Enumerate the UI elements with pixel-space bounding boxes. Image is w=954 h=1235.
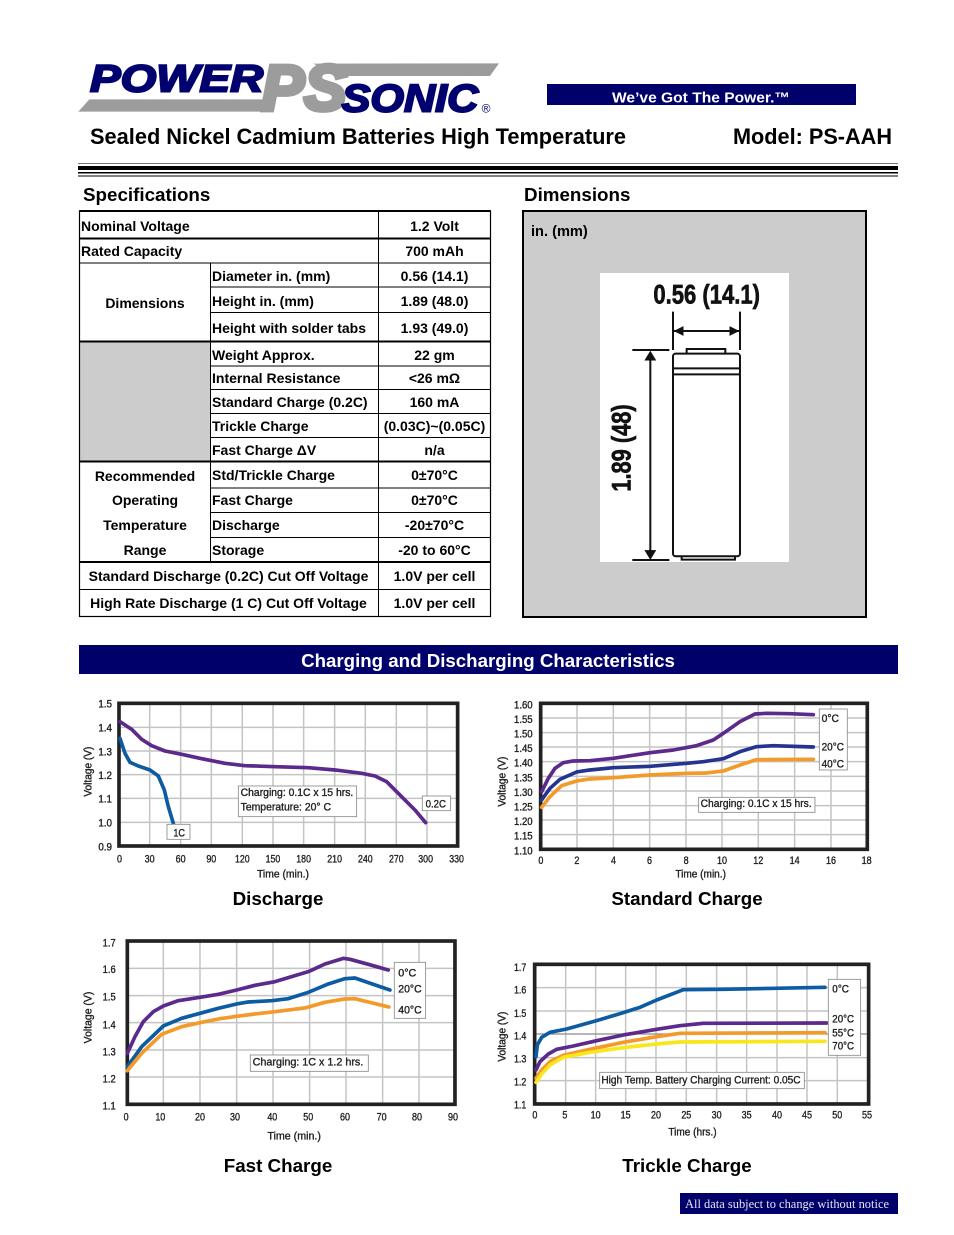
- specifications table: High Rate Discharge (1 C) Cut Off Voltage: [90, 595, 367, 611]
- chart: trickle charge: 35: [742, 1109, 752, 1121]
- chart: fast charge: 60: [340, 1112, 350, 1124]
- chart: discharge: 60: [176, 853, 186, 865]
- specifications table: Nominal Voltage: [81, 218, 190, 234]
- chart: trickle charge: 15: [621, 1109, 631, 1121]
- specifications table: Standard Discharge (0.2C) Cut Off Voltage: [89, 568, 369, 584]
- chart: trickle charge: 25: [681, 1109, 691, 1121]
- specifications table: n/a: [424, 442, 445, 458]
- title: Sealed Nickel Cadmium Batteries High Temperature: [90, 124, 626, 149]
- logo: Power-Sonic: POWER: [90, 58, 264, 101]
- chart: fast charge: 70: [377, 1112, 387, 1124]
- specifications table: Diameter in. (mm): [212, 268, 330, 284]
- chart: discharge: 1.1: [98, 794, 112, 806]
- chart: discharge: 240: [358, 853, 373, 865]
- chart: fast charge: 1.5: [103, 991, 116, 1003]
- chart: standard charge: [496, 699, 872, 881]
- chart: discharge: 0.9: [98, 841, 112, 853]
- specifications table: Discharge: [212, 517, 280, 533]
- chart: discharge: 0: [117, 853, 122, 865]
- chart: discharge: Temperature: 20° C: [241, 802, 331, 814]
- chart: discharge: Time (min.): [257, 869, 309, 881]
- chart: discharge: Charging: 0.1C x 15 hrs.: [241, 787, 353, 799]
- chart: fast charge: 1.3: [103, 1046, 116, 1058]
- specifications table: 1.89 (48.0): [401, 293, 468, 309]
- chart: standard charge: 18: [862, 855, 872, 867]
- logo: Power-Sonic: SONIC: [342, 77, 479, 121]
- panel: dimensions drawing: [523, 211, 866, 617]
- battery diagram: 1.89 (48): [607, 404, 637, 492]
- footer notice: [680, 1193, 898, 1214]
- specifications table: Recommended: [95, 468, 195, 484]
- chart: standard charge: 1.25: [514, 802, 533, 814]
- specifications table: Temperature: [103, 517, 187, 533]
- chart: standard charge: 1.15: [514, 831, 533, 843]
- chart: fast charge: 1.7: [103, 938, 116, 950]
- chart title: discharge: Discharge: [233, 888, 323, 909]
- heading: specifications: Specifications: [83, 184, 210, 205]
- specifications table: 0.56 (14.1): [401, 268, 468, 284]
- specifications table: 0±70°C: [411, 492, 458, 508]
- specifications table: Weight Approx.: [212, 347, 315, 363]
- model number: Model: PS-AAH: [733, 124, 892, 149]
- chart: standard charge: 1.35: [514, 772, 533, 784]
- specifications table: 160 mA: [410, 394, 459, 410]
- chart: trickle charge: 20: [651, 1109, 661, 1121]
- chart: standard charge: 0: [538, 855, 543, 867]
- chart: standard charge: 1.40: [514, 758, 533, 770]
- chart: trickle charge: 45: [802, 1109, 812, 1121]
- specifications table: 1.93 (49.0): [401, 320, 468, 336]
- chart: fast charge: 80: [412, 1112, 422, 1124]
- logo: Power-Sonic: [78, 52, 499, 124]
- chart: standard charge: Charging: 0.1C x 15 hrs.: [701, 798, 812, 810]
- chart: trickle charge: 40: [772, 1109, 782, 1121]
- chart: fast charge: 1.1: [103, 1100, 116, 1112]
- chart: standard charge: 2: [574, 855, 579, 867]
- chart: fast charge: 1.6: [103, 964, 116, 976]
- footer notice: All data subject to change without notice: [685, 1196, 889, 1211]
- chart: standard charge: 1.50: [514, 728, 533, 740]
- section banner: [79, 645, 898, 674]
- specifications table: 700 mAh: [405, 243, 464, 259]
- section banner: Charging and Discharging Characteristics: [301, 650, 675, 671]
- chart: trickle charge: 1.6: [514, 985, 526, 997]
- chart: discharge: 1.4: [98, 723, 112, 735]
- chart: standard charge: 4: [611, 855, 616, 867]
- logo: Power-Sonic: PS: [262, 52, 347, 124]
- chart: fast charge: Charging: 1C x 1.2 hrs.: [253, 1057, 363, 1069]
- chart: trickle charge: High Temp. Battery Charging Current: 0.05C: [601, 1074, 801, 1086]
- specifications table: Range: [124, 542, 167, 558]
- chart title: fast charge: Fast Charge: [224, 1155, 332, 1176]
- specifications table: (0.03C)~(0.05C): [384, 418, 485, 434]
- specifications table: -20 to 60°C: [398, 542, 471, 558]
- chart: trickle charge: 50: [832, 1109, 842, 1121]
- chart: fast charge: Voltage (V): [83, 991, 95, 1043]
- chart: trickle charge: 1.3: [514, 1054, 526, 1066]
- specifications table: -20±70°C: [405, 517, 464, 533]
- specifications table: Standard Charge (0.2C): [212, 394, 368, 410]
- chart: fast charge: 0: [124, 1112, 129, 1124]
- chart: fast charge: 0°C: [398, 968, 416, 980]
- specifications table: Storage: [212, 542, 264, 558]
- specifications table: Height in. (mm): [212, 293, 314, 309]
- specifications table: Height with solder tabs: [212, 320, 366, 336]
- logo: Power-Sonic: ®: [482, 101, 491, 115]
- chart: trickle charge: 70°C: [832, 1040, 854, 1052]
- chart: discharge: 1.2: [98, 770, 112, 782]
- heading: dimensions: Dimensions: [524, 184, 630, 205]
- chart: discharge: 180: [296, 853, 311, 865]
- chart: fast charge: [83, 938, 458, 1142]
- chart: trickle charge: Voltage (V): [496, 1011, 508, 1062]
- specifications table: 1.2 Volt: [410, 218, 459, 234]
- battery diagram: [607, 280, 760, 560]
- chart: trickle charge: 10: [591, 1109, 601, 1121]
- chart: trickle charge: 1.2: [514, 1076, 526, 1088]
- chart: fast charge: 1.2: [103, 1074, 116, 1086]
- specifications table: 22 gm: [414, 347, 455, 363]
- chart: discharge: 270: [389, 853, 404, 865]
- specifications table: [80, 211, 490, 616]
- chart: trickle charge: 30: [712, 1109, 722, 1121]
- chart: trickle charge: 1.4: [514, 1030, 526, 1042]
- chart: trickle charge: 55°C: [832, 1028, 854, 1040]
- chart: trickle charge: 20°C: [832, 1014, 854, 1026]
- chart: standard charge: Time (min.): [675, 869, 726, 881]
- specifications table: Fast Charge ΔV: [212, 442, 317, 458]
- specifications table: Dimensions: [105, 295, 185, 311]
- specifications table: Operating: [112, 492, 178, 508]
- chart: fast charge: 40: [267, 1112, 277, 1124]
- chart: discharge: 120: [235, 853, 250, 865]
- chart: fast charge: 10: [155, 1112, 165, 1124]
- chart: standard charge: Voltage (V): [496, 756, 508, 807]
- chart: trickle charge: [496, 962, 872, 1139]
- chart: discharge: 1C: [173, 828, 185, 840]
- chart: standard charge: 1.20: [514, 816, 533, 828]
- chart: fast charge: 30: [230, 1112, 240, 1124]
- chart: fast charge: Time (min.): [267, 1130, 321, 1142]
- chart: standard charge: 1.55: [514, 714, 533, 726]
- chart: discharge: 300: [418, 853, 433, 865]
- specifications table: Trickle Charge: [212, 418, 309, 434]
- battery diagram: 0.56 (14.1): [653, 280, 760, 310]
- chart: discharge: 330: [449, 853, 464, 865]
- specifications table: 1.0V per cell: [394, 595, 475, 611]
- chart: discharge: 150: [266, 853, 280, 865]
- chart: trickle charge: 1.7: [514, 962, 526, 974]
- chart: standard charge: 14: [790, 855, 800, 867]
- specifications table: 0±70°C: [411, 467, 458, 483]
- chart: discharge: 210: [327, 853, 342, 865]
- chart: fast charge: 1.4: [103, 1019, 116, 1031]
- chart title: trickle charge: Trickle Charge: [622, 1155, 752, 1176]
- chart: standard charge: 1.10: [514, 845, 533, 857]
- chart: standard charge: 1.30: [514, 787, 533, 799]
- chart: standard charge: 8: [684, 855, 689, 867]
- specifications table: Rated Capacity: [81, 243, 182, 259]
- chart: standard charge: 12: [753, 855, 763, 867]
- chart: discharge: 0.2C: [426, 798, 446, 810]
- chart: discharge: 1.0: [98, 818, 112, 830]
- chart: standard charge: 6: [647, 855, 652, 867]
- specifications table: Internal Resistance: [212, 370, 341, 386]
- chart: discharge: 1.5: [98, 699, 112, 711]
- chart: trickle charge: 5: [562, 1109, 567, 1121]
- chart: discharge: 1.3: [98, 746, 112, 758]
- chart: standard charge: 1.45: [514, 743, 533, 755]
- tagline banner: [547, 84, 856, 106]
- chart: fast charge: 40°C: [398, 1004, 422, 1016]
- chart: standard charge: 1.60: [514, 699, 533, 711]
- chart: fast charge: 20: [195, 1112, 205, 1124]
- chart: standard charge: 20°C: [822, 742, 844, 754]
- specifications table: 1.0V per cell: [394, 568, 475, 584]
- chart: trickle charge: 0°C: [832, 984, 849, 996]
- specifications table: Std/Trickle Charge: [212, 467, 335, 483]
- specifications table: Fast Charge: [212, 492, 293, 508]
- chart: fast charge: 20°C: [398, 984, 422, 996]
- chart: trickle charge: 0: [532, 1109, 537, 1121]
- chart: trickle charge: 55: [862, 1109, 872, 1121]
- chart: fast charge: 90: [448, 1112, 458, 1124]
- chart: standard charge: 0°C: [822, 713, 839, 725]
- chart: discharge: Voltage (V): [83, 746, 95, 797]
- chart: standard charge: 10: [717, 855, 727, 867]
- chart title: standard charge: Standard Charge: [611, 888, 763, 909]
- chart: discharge: [83, 699, 464, 881]
- chart: standard charge: 16: [826, 855, 836, 867]
- chart: trickle charge: Time (hrs.): [668, 1127, 717, 1139]
- chart: trickle charge: 1.5: [514, 1008, 526, 1020]
- chart: standard charge: 40°C: [822, 758, 844, 770]
- chart: fast charge: 50: [303, 1112, 313, 1124]
- chart: trickle charge: 1.1: [514, 1099, 526, 1111]
- chart: discharge: 30: [145, 853, 155, 865]
- specifications table: <26 mΩ: [409, 370, 460, 386]
- tagline banner: We’ve Got The Power.™: [612, 90, 790, 106]
- chart: discharge: 90: [206, 853, 216, 865]
- panel: dimensions drawing: in. (mm): [531, 224, 588, 240]
